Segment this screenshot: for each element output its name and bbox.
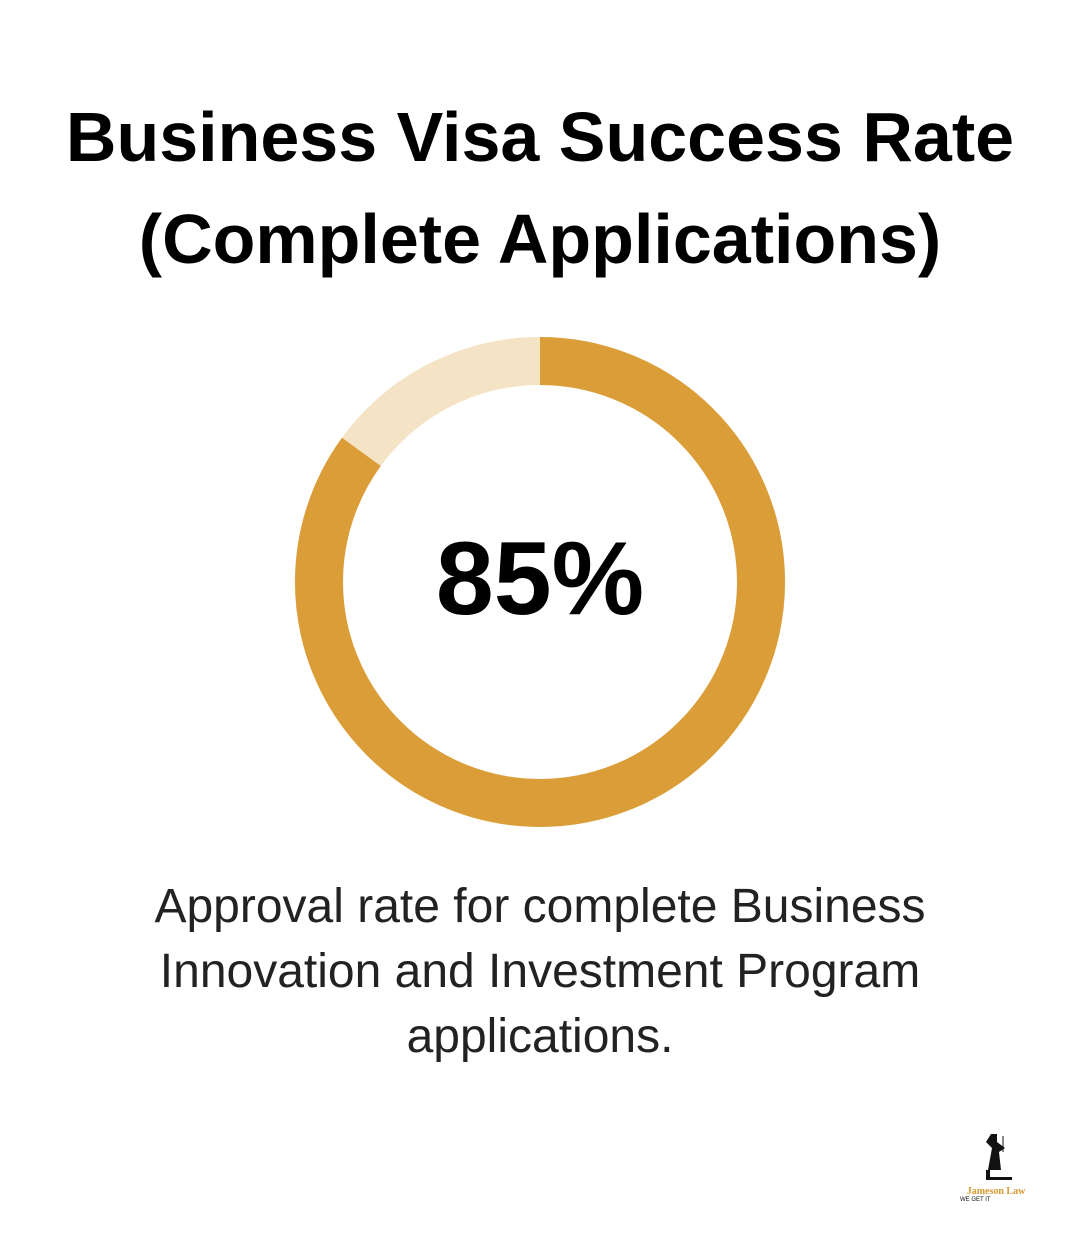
description text [154, 880, 926, 1063]
description text: applications. [407, 1010, 673, 1063]
title: (Complete Applications) [139, 200, 941, 278]
logo: WE GET IT [960, 1197, 991, 1203]
title [66, 98, 1014, 278]
donut chart: 85% [436, 521, 644, 637]
description text: Approval rate for complete Business [154, 880, 926, 933]
title: Business Visa Success Rate [66, 98, 1014, 176]
logo: Jameson Law [967, 1186, 1025, 1197]
description text: Innovation and Investment Program [160, 945, 920, 998]
logo [960, 1134, 1026, 1203]
